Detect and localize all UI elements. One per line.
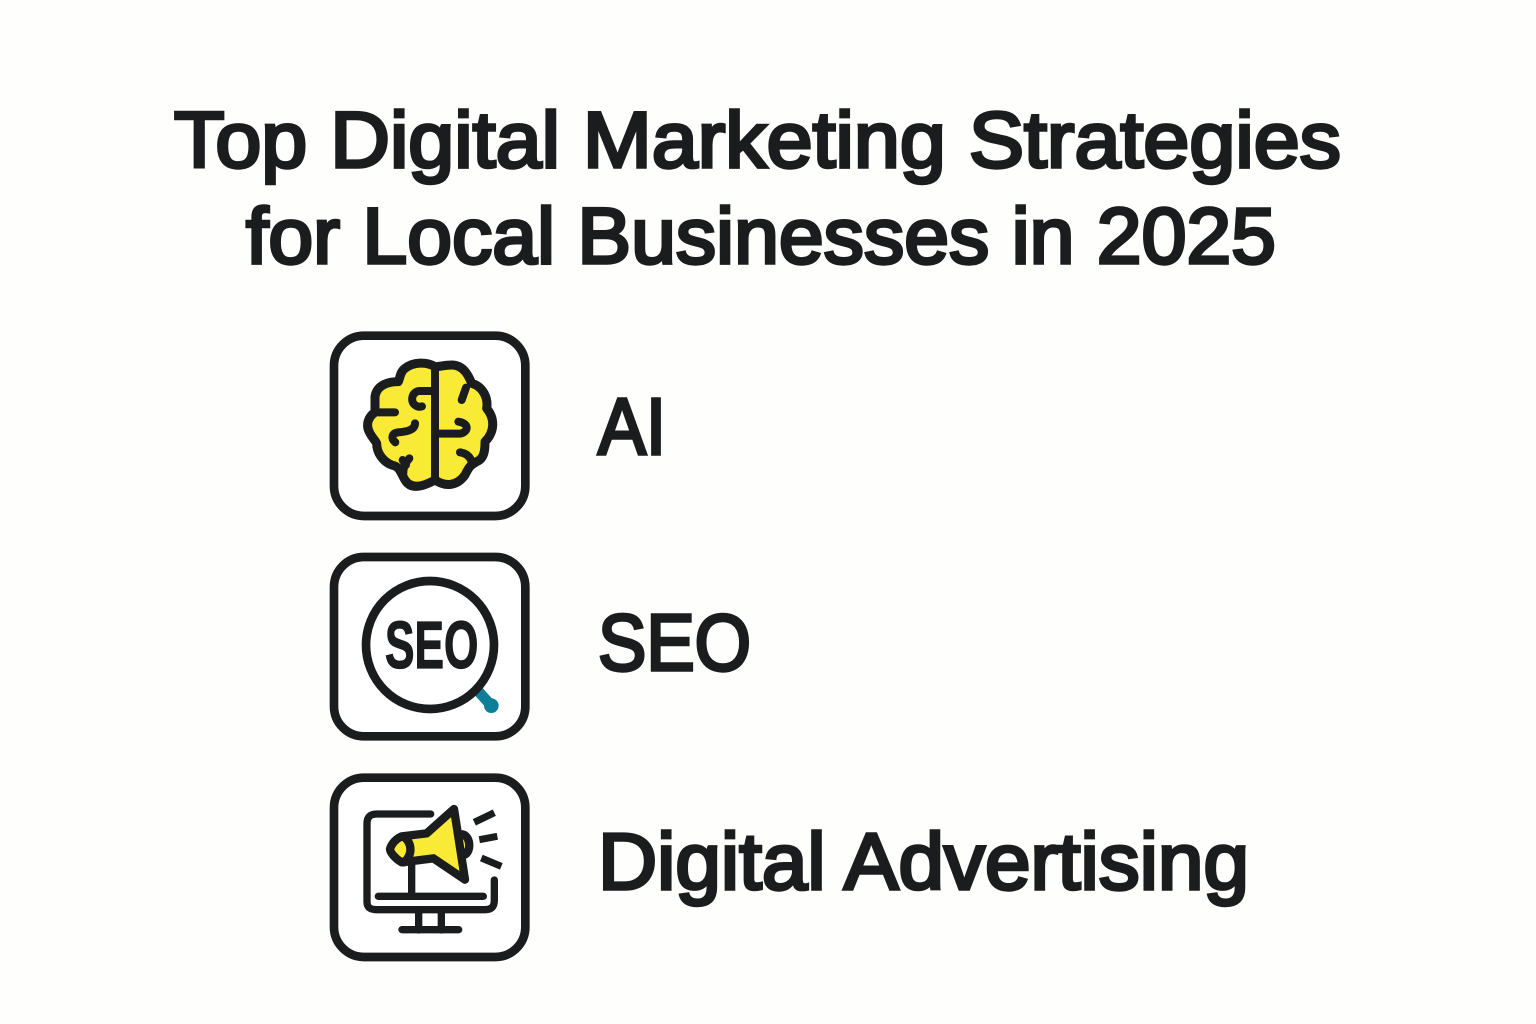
row: AI	[334, 336, 666, 516]
sound lines	[474, 813, 501, 866]
label: AI: AI	[598, 382, 666, 471]
label: Digital Advertising: Digital Advertising	[598, 817, 1249, 906]
title	[174, 95, 1341, 280]
megaphone	[390, 809, 469, 880]
title: Top Digital Marketing Strategies	[174, 95, 1341, 184]
icon: monitor with megaphone	[334, 778, 525, 957]
icon: brain	[334, 336, 525, 516]
lens text: SEO	[385, 609, 478, 683]
monitor	[367, 814, 494, 930]
magnifier handle	[479, 692, 499, 713]
label: SEO: SEO	[598, 598, 751, 687]
title: for Local Businesses in 2025	[246, 191, 1276, 280]
magnifier lens	[366, 581, 494, 709]
row: Digital Advertising	[334, 778, 1249, 957]
icon: SEO magnifier	[334, 557, 525, 736]
row: SEO	[334, 557, 751, 736]
